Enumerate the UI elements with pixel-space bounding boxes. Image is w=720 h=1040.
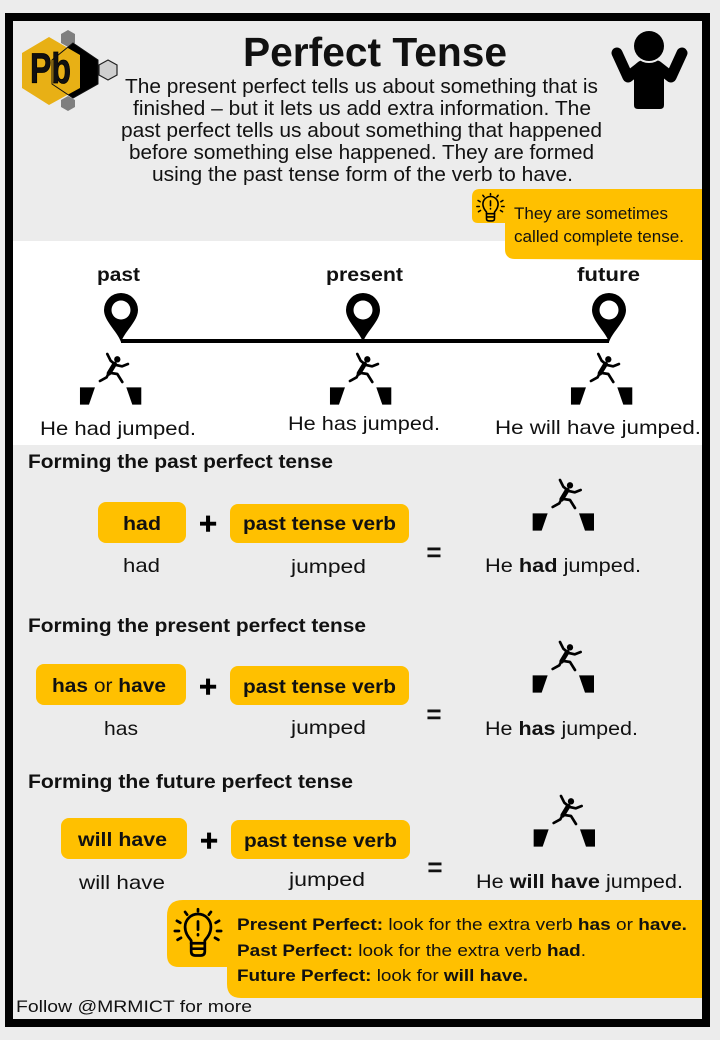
pill: past tense verb <box>231 820 410 859</box>
past marker: He had jumped. <box>40 418 196 440</box>
example words: has <box>104 718 138 740</box>
callout: complete tense tip: They are sometimes <box>514 205 668 223</box>
equals sign: = <box>426 699 442 729</box>
pill: past tense verb: past tense verb <box>244 830 397 852</box>
icon: large light bulb <box>175 909 221 955</box>
pill: past tense verb <box>230 666 409 705</box>
result sentence: He had jumped. <box>485 555 641 577</box>
equals sign: = <box>427 852 443 882</box>
heading: present perfect: Forming the present perfect tense <box>28 615 366 637</box>
panel: past perfect formula: jumped <box>290 556 366 578</box>
intro text: finished – but it lets us add extra information. The <box>133 97 591 120</box>
panel: present perfect formula <box>28 615 638 740</box>
icon: jumper <box>533 642 594 693</box>
heading: past perfect: Forming the past perfect tense <box>28 451 333 473</box>
future marker <box>495 264 701 439</box>
callout: complete tense tip: called complete tense. <box>514 228 684 246</box>
icon: jumper <box>534 796 595 847</box>
heading: future perfect: Forming the future perfect tense <box>28 771 353 793</box>
panel: future perfect formula: jumped <box>288 869 365 891</box>
plus sign: + <box>199 669 217 704</box>
intro text <box>121 75 602 186</box>
icon: small light bulb <box>477 194 504 221</box>
result sentence: He has jumped. <box>485 718 638 740</box>
pill: past tense verb: past tense verb <box>243 513 396 535</box>
footer credit: Follow @MRMICT for more <box>16 997 252 1016</box>
callout: how to spot each tense: Present Perfect: look for the extra verb has or have. <box>237 916 687 934</box>
intro text: using the past tense form of the verb to have. <box>152 163 573 186</box>
pill: had: had <box>123 513 161 535</box>
example words: will have <box>78 872 165 894</box>
present marker: He has jumped. <box>288 413 440 435</box>
white timeline band <box>13 241 702 445</box>
intro text: before something else happened. They are formed <box>129 141 594 164</box>
pill: had <box>98 502 186 543</box>
icon: Pb hexagon logo <box>22 30 117 111</box>
timeline <box>40 264 701 440</box>
pill: will have <box>61 818 187 859</box>
plus sign: + <box>199 506 217 541</box>
pill: has or have <box>36 664 186 705</box>
callout: how to spot each tense: Future Perfect: look for will have. <box>237 967 528 985</box>
present marker: present <box>326 264 404 286</box>
future marker: future <box>577 264 640 286</box>
panel: present perfect formula: jumped <box>290 717 366 739</box>
past marker: past <box>97 264 141 286</box>
intro text: The present perfect tells us about something that is <box>125 75 598 98</box>
pill: past tense verb <box>230 504 409 543</box>
callout: complete tense tip <box>472 189 702 260</box>
callout: how to spot each tense <box>167 900 702 998</box>
pill: has or have: has or have <box>52 675 166 697</box>
timeline line <box>121 339 609 343</box>
panel: future perfect formula <box>28 771 683 894</box>
present marker <box>288 264 440 435</box>
equals sign: = <box>426 537 442 567</box>
panel: past perfect formula <box>28 451 641 578</box>
pill: past tense verb: past tense verb <box>243 676 396 698</box>
future marker: He will have jumped. <box>495 417 701 439</box>
title: Perfect Tense <box>243 29 507 75</box>
callout: how to spot each tense: Past Perfect: look for the extra verb had . <box>237 942 586 960</box>
intro text: past perfect tells us about something that happened <box>121 119 602 142</box>
pill: will have: will have <box>77 829 167 851</box>
icon: Pb hexagon logo: Pb <box>30 46 71 93</box>
result sentence: He will have jumped. <box>476 871 683 893</box>
plus sign: + <box>200 823 218 858</box>
icon: shrugging person <box>617 29 682 109</box>
example words: had <box>123 555 160 577</box>
past marker <box>40 264 196 440</box>
icon: jumper <box>533 480 594 531</box>
